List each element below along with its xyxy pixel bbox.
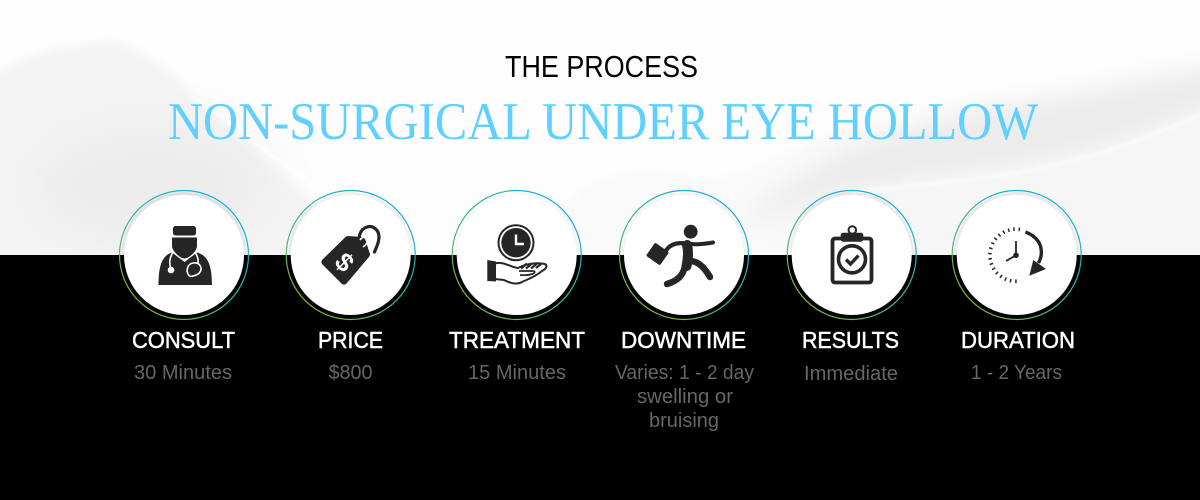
- value: $800: $800: [328, 362, 372, 384]
- icon: clipboard with check: [832, 226, 872, 282]
- step: downtime: [615, 190, 754, 432]
- value: 1 - 2 years: 1 - 2 Years: [971, 362, 1062, 384]
- title: non-surgical under eye hollow: NON-SURGICAL UNDER EYE HOLLOW: [168, 93, 1038, 151]
- circle: price: [286, 190, 415, 320]
- value: varies 1 - 2 day swelling or bruising: bruising: [649, 410, 719, 432]
- value: varies 1 - 2 day swelling or bruising: swelling or: [637, 386, 733, 408]
- circle: treatment: [452, 190, 581, 320]
- icon: clock with arrow: [990, 229, 1046, 281]
- step: duration: [952, 190, 1081, 384]
- step: treatment: [449, 190, 585, 384]
- background: silky white and grey upper band: [0, 0, 1200, 270]
- icon: running businessman: [646, 225, 713, 284]
- label: treatment: TREATMENT: [449, 327, 585, 353]
- circle: consult: [120, 190, 248, 320]
- circle: results: [787, 190, 916, 320]
- step: results: [787, 190, 916, 385]
- label: downtime: DOWNTIME: [621, 327, 746, 353]
- value: varies 1 - 2 day swelling or bruising: Varies: 1 - 2 day: [615, 362, 754, 384]
- value: immediate: Immediate: [804, 363, 898, 385]
- heading: the process: THE PROCESS: [505, 50, 698, 84]
- label: consult: CONSULT: [132, 327, 235, 353]
- circle: downtime: [620, 190, 748, 320]
- icon: doctor: [158, 226, 212, 285]
- label: duration: DURATION: [961, 327, 1075, 353]
- value: 15 minutes: 15 Minutes: [468, 362, 566, 384]
- value: varies 1 - 2 day swelling or bruising: [615, 362, 754, 432]
- icon: price tag: $: [329, 246, 361, 278]
- circle: duration: [952, 190, 1081, 320]
- label: results: RESULTS: [802, 327, 899, 353]
- icon: price tag: [321, 227, 379, 285]
- step: price: [286, 190, 415, 384]
- step: consult: [120, 190, 248, 384]
- label: price: PRICE: [318, 327, 383, 353]
- background: black lower band: [0, 255, 1200, 500]
- icon: hand holding clock: [487, 225, 546, 283]
- value: 30 minutes: 30 Minutes: [134, 362, 232, 384]
